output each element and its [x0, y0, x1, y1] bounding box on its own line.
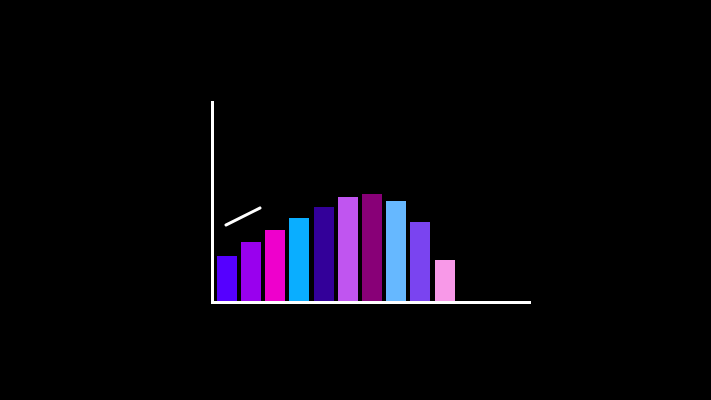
axes [211, 101, 531, 304]
trend line segment [226, 208, 260, 225]
bars [217, 194, 455, 301]
